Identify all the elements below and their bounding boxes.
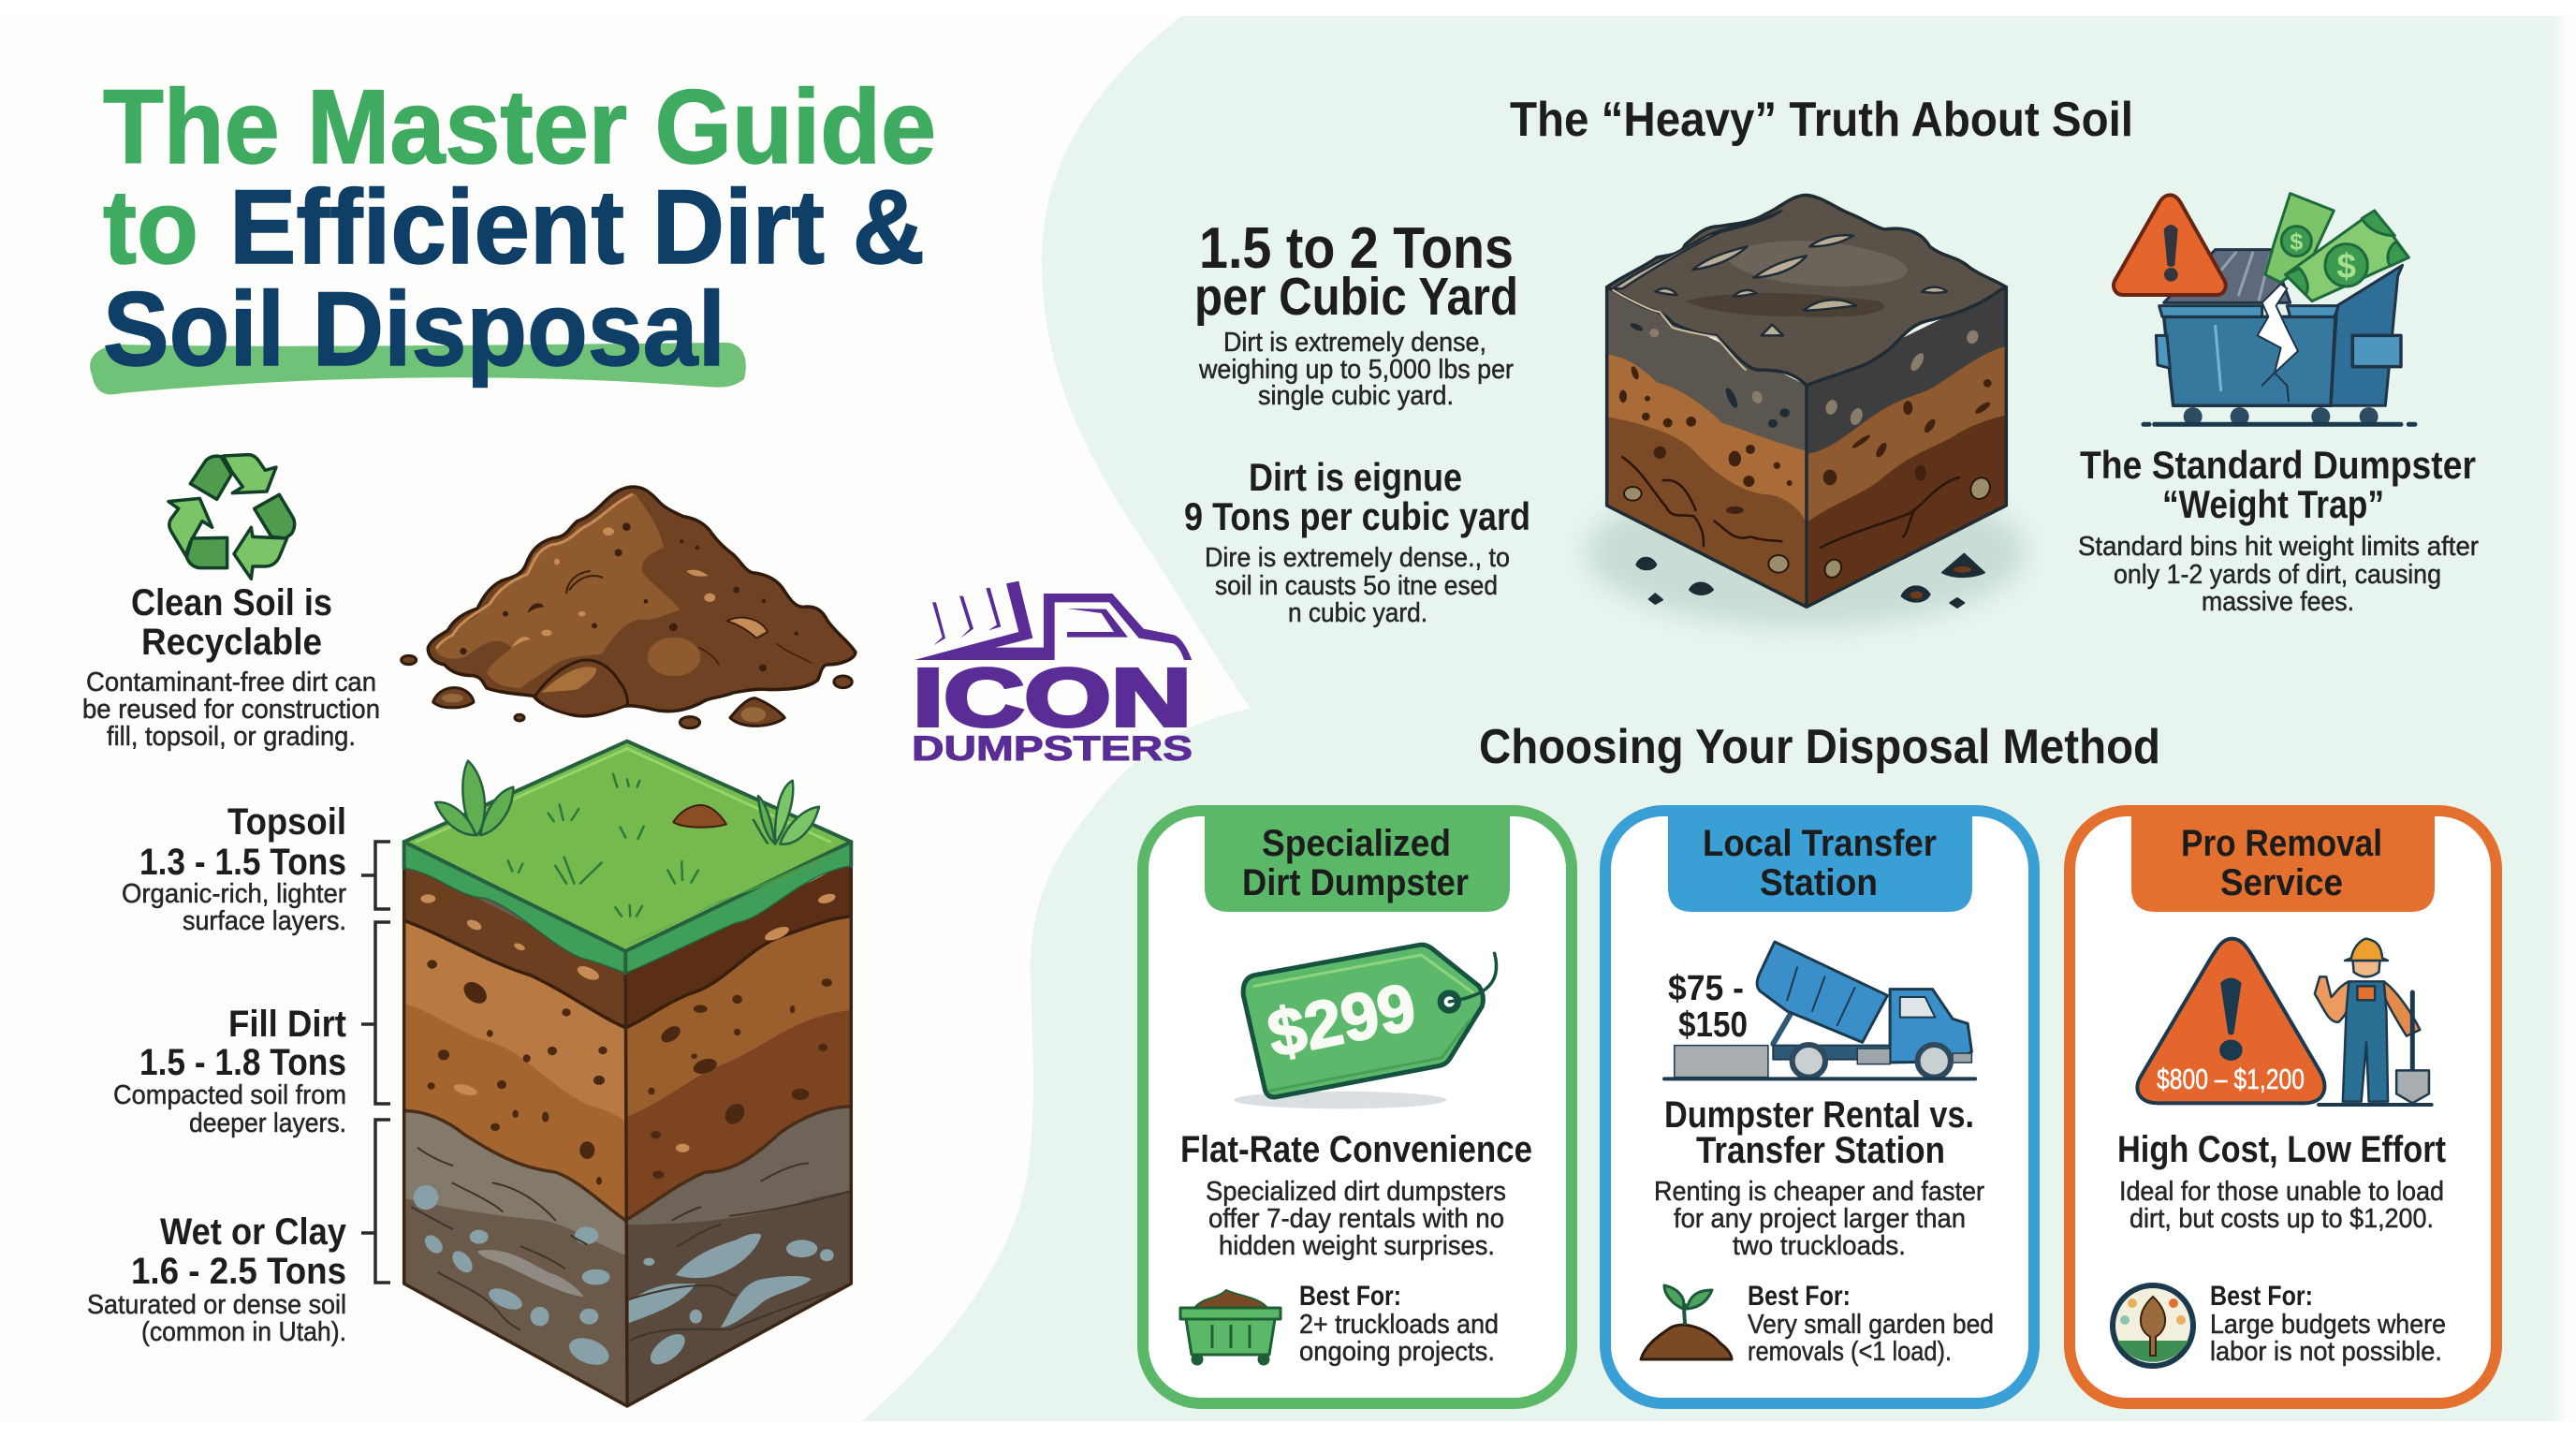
stat: 1.5 to 2 tons: 1.5 to 2 Tons [1199, 216, 1514, 281]
soil flecks [1619, 365, 1992, 514]
illustration: dirt pile [402, 487, 856, 728]
label: fill dirt [113, 1004, 346, 1138]
text: clean soil is recyclable: Contaminant-free dirt can [86, 668, 376, 697]
bracket: topsoil [361, 842, 390, 909]
worker [2315, 939, 2429, 1103]
card: pro removal service: Service [2220, 862, 2343, 903]
label: topsoil: 1.3 - 1.5 Tons [139, 842, 346, 883]
logo truck mark [915, 581, 1192, 660]
card: local transfer station: Transfer Station [1696, 1130, 1945, 1171]
card: local transfer station: Dumpster Rental vs. [1664, 1094, 1974, 1136]
label: topsoil: Topsoil [227, 801, 346, 843]
card tab [1668, 811, 1972, 912]
text: clean soil is recyclable: Recyclable [141, 622, 322, 663]
stat: 1.5 to 2 tons: single cubic yard. [1258, 381, 1454, 411]
icon: tree badge [2113, 1285, 2193, 1366]
stat: dirt is eignue: 9 Tons per cubic yard [1184, 494, 1530, 538]
mound on grass [673, 805, 726, 828]
text: the standard dumpster weight trap: only 1-2 yards of dirt, causing [2114, 560, 2441, 590]
card: local transfer station [1605, 811, 2034, 1403]
text: the standard dumpster weight trap: The Standard Dumpster [2080, 443, 2476, 487]
card: pro removal service: Large budgets where [2210, 1310, 2446, 1340]
card: pro removal service: labor is not possible. [2210, 1337, 2442, 1367]
stat: dirt is eignue: soil in causts 5o itne esed [1215, 571, 1498, 601]
heading: choosing your disposal method: Choosing Your Disposal Method [1479, 720, 2160, 774]
label: topsoil: surface layers. [183, 906, 346, 936]
label: topsoil [122, 801, 346, 936]
outline [1607, 287, 2006, 607]
card: specialized dirt dumpster: hidden weight surprises. [1219, 1231, 1495, 1261]
card: pro removal service: Pro Removal [2181, 823, 2382, 864]
logo: icon dumpsters: ICON [913, 653, 1192, 743]
card: pro removal service: Ideal for those unable to load [2119, 1177, 2444, 1207]
card: local transfer station: Local Transfer [1703, 823, 1937, 864]
heading: heavy truth: The “Heavy” Truth About Soil [1510, 93, 2133, 147]
stat: 1.5 to 2 tons [1194, 216, 1518, 411]
right face [1807, 287, 2006, 607]
logo: icon dumpsters [912, 581, 1193, 768]
stat: dirt is eignue: Dirt is eignue [1249, 455, 1462, 499]
title: to [103, 169, 198, 286]
money notes: $ [2290, 229, 2303, 256]
title: The Master Guide [103, 68, 936, 185]
label: topsoil: Organic-rich, lighter [122, 879, 346, 909]
label: wet or clay: Saturated or dense soil [87, 1290, 346, 1320]
text: clean soil is recyclable: be reused for construction [82, 695, 380, 725]
dropped clods [1636, 554, 1984, 608]
card: local transfer station: removals (<1 load). [1748, 1337, 1952, 1367]
stat: 1.5 to 2 tons: Dirt is extremely dense, [1223, 328, 1486, 358]
bracket: wet or clay [361, 1120, 390, 1283]
card: local transfer station: Very small garden bed [1748, 1310, 1994, 1340]
icon: price tag [1234, 945, 1497, 1108]
icon: green dumpster [1180, 1290, 1281, 1365]
card: local transfer station: for any project larger than [1674, 1204, 1966, 1234]
dumpster lid [2164, 250, 2291, 302]
illustration: soil profile block [404, 741, 851, 1406]
stat: dirt is eignue: n cubic yard. [1288, 598, 1427, 628]
left face [1607, 287, 1807, 607]
label: wet or clay: (common in Utah). [141, 1317, 346, 1347]
title underline swash [90, 343, 746, 394]
label: fill dirt: Compacted soil from [113, 1080, 346, 1110]
label: fill dirt: 1.5 - 1.8 Tons [139, 1042, 346, 1083]
grass tufts [435, 761, 819, 844]
icon: overloaded dumpster with warning and money [2114, 194, 2415, 426]
card: pro removal service: High Cost, Low Effort [2117, 1129, 2446, 1170]
card: specialized dirt dumpster: Dirt Dumpster [1242, 862, 1469, 903]
logo: icon dumpsters: DUMPSTERS [912, 729, 1193, 768]
warning triangle [2114, 195, 2226, 295]
card: pro removal service: $800 – $1,200 [2157, 1063, 2305, 1095]
card: specialized dirt dumpster: offer 7-day rentals with no [1208, 1204, 1504, 1234]
icon: price tag: $299 [1262, 969, 1422, 1071]
text: clean soil is recyclable [82, 582, 380, 752]
label: fill dirt: deeper layers. [189, 1108, 346, 1138]
bracket: fill dirt [361, 922, 390, 1104]
card: specialized dirt dumpster: Best For: [1299, 1281, 1401, 1312]
card: local transfer station: Renting is cheaper and faster [1654, 1177, 1984, 1207]
title: Efficient Dirt & [229, 169, 925, 286]
card: pro removal service [2070, 811, 2496, 1403]
money notes: $ [2336, 247, 2356, 286]
text: clean soil is recyclable: Clean Soil is [131, 582, 332, 624]
title [90, 68, 936, 394]
icon: dump truck [1664, 942, 1975, 1078]
card: specialized dirt dumpster: Specialized dirt dumpsters [1206, 1177, 1506, 1207]
text: the standard dumpster weight trap [2078, 443, 2479, 617]
mounded top [1607, 195, 2006, 386]
icon: warning with cost and worker [2137, 939, 2432, 1105]
stat: dirt is eignue [1184, 455, 1530, 628]
card: local transfer station: Station [1760, 862, 1878, 903]
card: specialized dirt dumpster: ongoing projects. [1299, 1337, 1495, 1367]
water stones [414, 1185, 834, 1371]
label: wet or clay [87, 1211, 347, 1347]
text: the standard dumpster weight trap: massive fees. [2202, 587, 2354, 617]
card tab [2131, 811, 2435, 912]
card: local transfer station: $150 [1678, 1005, 1748, 1045]
stat: dirt is eignue: Dire is extremely dense., to [1205, 543, 1510, 573]
card: specialized dirt dumpster [1143, 811, 1572, 1403]
text: the standard dumpster weight trap: “Weight Trap” [2162, 482, 2384, 526]
text: clean soil is recyclable: fill, topsoil, or grading. [107, 722, 356, 752]
label: wet or clay: Wet or Clay [160, 1211, 347, 1253]
right face layers [625, 861, 851, 1406]
card: specialized dirt dumpster: Specialized [1262, 823, 1451, 864]
soil spots [427, 960, 832, 1185]
grass marks [508, 774, 698, 917]
label: fill dirt: Fill Dirt [228, 1004, 346, 1045]
illustration: cubic yard of soil [1586, 195, 2026, 627]
icon: recycle [168, 455, 295, 579]
stat: 1.5 to 2 tons: weighing up to 5,000 lbs per [1198, 355, 1514, 385]
title: Soil Disposal [103, 271, 725, 388]
icon: seedling in soil [1641, 1285, 1732, 1359]
money notes [2265, 194, 2408, 301]
grassy top surface [404, 741, 851, 973]
card: local transfer station: $75 - [1668, 969, 1744, 1008]
card: local transfer station: two truckloads. [1733, 1231, 1906, 1261]
crack [2258, 284, 2298, 373]
card: specialized dirt dumpster: Flat-Rate Convenience [1180, 1129, 1532, 1170]
left face layers [404, 842, 625, 1406]
stat: 1.5 to 2 tons: per Cubic Yard [1194, 267, 1518, 327]
label: wet or clay: 1.6 - 2.5 Tons [131, 1251, 346, 1292]
card: pro removal service: Best For: [2210, 1281, 2313, 1312]
panel: green background [862, 16, 2567, 1421]
text: the standard dumpster weight trap: Standard bins hit weight limits after [2078, 532, 2479, 562]
card: local transfer station: Best For: [1748, 1281, 1851, 1312]
card tab [1205, 811, 1510, 912]
dumpster body [2331, 265, 2403, 405]
card: specialized dirt dumpster: 2+ truckloads and [1299, 1310, 1499, 1340]
card: pro removal service: dirt, but costs up to $1,200. [2130, 1204, 2434, 1234]
